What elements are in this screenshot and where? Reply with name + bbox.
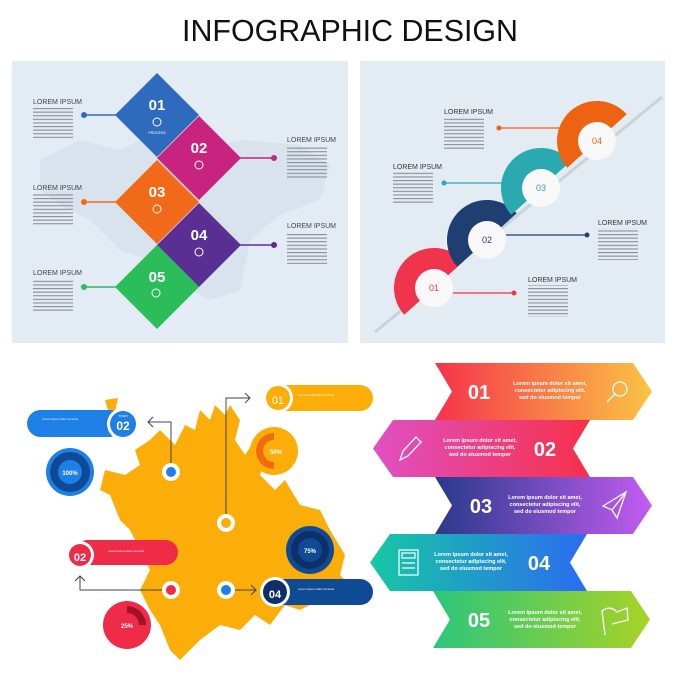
chart: 75% — [286, 526, 334, 574]
callout: town 02 red: 02 — [74, 552, 86, 564]
chart: 50%: 50% — [270, 450, 283, 456]
banner 05: 05 — [468, 610, 490, 632]
diamond 05: 05 — [149, 269, 165, 286]
banner 01: sed do eiusmod tempor — [519, 395, 582, 401]
banner 04: sed do eiusmod tempor — [440, 566, 503, 572]
chart: 100%: 100% — [62, 471, 78, 477]
banner 01: consectetur adipiscing elit, — [515, 388, 586, 394]
banner 01: Lorem ipsum dolor sit amet, — [513, 381, 587, 387]
text blocks: LOREM IPSUM — [287, 137, 336, 144]
connectors — [81, 112, 277, 290]
panel: diagonal steps — [360, 61, 665, 343]
step 04 — [541, 85, 639, 182]
step 01 — [378, 232, 476, 329]
banner 05: sed do eiusmod tempor — [514, 624, 577, 630]
text blocks — [393, 109, 647, 284]
text blocks: LOREM IPSUM — [444, 109, 493, 116]
text blocks: LOREM IPSUM — [33, 185, 82, 192]
diamond 01: PROCESS — [148, 131, 166, 135]
text blocks: LOREM IPSUM — [528, 277, 577, 284]
text blocks — [33, 99, 336, 277]
arrows — [75, 393, 256, 595]
diamond 01: 01 — [149, 97, 165, 114]
markers — [162, 463, 235, 599]
banner 05: consectetur adipiscing elit, — [510, 617, 581, 623]
diamond 01 — [115, 73, 199, 157]
panel: diamond options — [12, 61, 348, 343]
banner 04: consectetur adipiscing elit, — [436, 559, 507, 565]
banner 03: sed do eiusmod tempor — [514, 509, 577, 515]
callout: town 01 yellow: Lorem ipsum dolor sit amet — [298, 393, 334, 397]
chart: 100% — [46, 448, 94, 496]
diamond 03: 03 — [149, 184, 165, 201]
callout: town 04 navy: 04 — [269, 589, 282, 601]
step 02 — [431, 184, 529, 281]
diamond 03 — [115, 160, 199, 244]
diamond 02 — [157, 116, 241, 200]
panel: arrow banners — [370, 363, 652, 648]
step 03: 03 — [536, 183, 546, 193]
banner 02: consectetur adipiscing elit, — [445, 445, 516, 451]
chart: 25% — [103, 601, 151, 649]
banner 04: Lorem ipsum dolor sit amet, — [434, 552, 508, 558]
diamond 02: 02 — [191, 140, 207, 157]
step 04: 04 — [592, 136, 602, 146]
callout: town 02 blue: Lorem ipsum dolor sit amet — [42, 417, 78, 421]
banner 01: 01 — [468, 382, 490, 404]
diamond 04: 04 — [191, 227, 208, 244]
banner 04 — [370, 534, 587, 591]
banner 03: consectetur adipiscing elit, — [510, 502, 581, 508]
banner 05 — [433, 591, 650, 648]
callout: town 02 red: Lorem ipsum dolor sit amet — [108, 549, 144, 553]
callout: town 01 yellow: 01 — [272, 395, 284, 407]
banner 02: sed do eiusmod tempor — [449, 452, 512, 458]
banner 01 — [435, 363, 652, 420]
chart: 25%: 25% — [121, 624, 134, 630]
banner 02 — [373, 420, 590, 477]
chart: 50% — [250, 427, 298, 475]
text blocks: LOREM IPSUM — [33, 270, 82, 277]
step 02: 02 — [482, 235, 492, 245]
banner 05: Lorem ipsum dolor sit amet, — [508, 610, 582, 616]
title: INFOGRAPHIC DESIGN — [182, 13, 518, 48]
step 01: 01 — [429, 283, 439, 293]
text blocks: LOREM IPSUM — [598, 220, 647, 227]
text blocks: LOREM IPSUM — [393, 164, 442, 171]
panel: map infographic — [27, 383, 373, 660]
step 03 — [485, 132, 583, 229]
callout: town 02 blue: TOWN — [118, 414, 128, 418]
callout: town 01 yellow — [263, 383, 373, 413]
banner 02: Lorem ipsum dolor sit amet, — [443, 438, 517, 444]
banner 04: 04 — [528, 553, 551, 575]
callout: town 02 blue — [27, 408, 139, 440]
text blocks: LOREM IPSUM — [33, 99, 82, 106]
banner 03 — [435, 477, 652, 534]
banner 03: 03 — [470, 496, 492, 518]
callout: town 02 blue: 02 — [116, 419, 130, 433]
chart: 75%: 75% — [304, 549, 317, 555]
diamond 05 — [115, 245, 199, 329]
callout: town 04 navy — [260, 577, 373, 607]
map blob — [100, 398, 355, 660]
banner 02: 02 — [534, 439, 556, 461]
text blocks: LOREM IPSUM — [287, 223, 336, 230]
callout: town 04 navy: Lorem ipsum dolor sit amet — [298, 587, 334, 591]
banner 03: Lorem ipsum dolor sit amet, — [508, 495, 582, 501]
callout: town 02 red — [66, 540, 178, 569]
connectors — [442, 126, 590, 296]
diamond 04 — [157, 203, 241, 287]
